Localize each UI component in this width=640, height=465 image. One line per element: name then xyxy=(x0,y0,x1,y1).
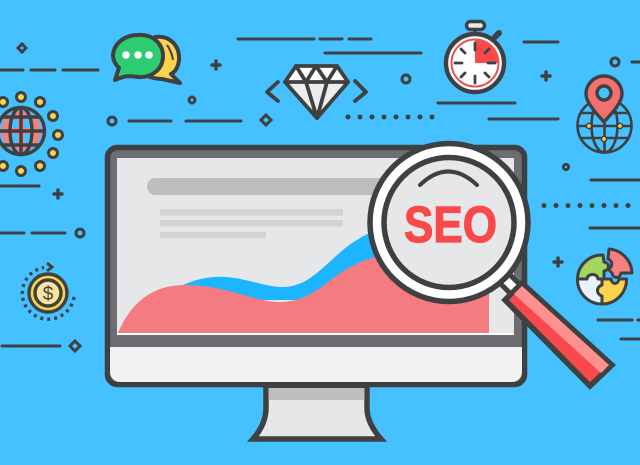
lens xyxy=(384,158,514,288)
glare arc xyxy=(420,172,477,185)
area chart: red series xyxy=(118,255,489,333)
small circle markers xyxy=(76,58,619,237)
handle xyxy=(505,283,612,386)
icon: dollar coin: $ xyxy=(43,284,54,305)
icon: chat bubbles xyxy=(113,35,180,83)
monitor xyxy=(108,148,524,384)
SEO label: SEO xyxy=(404,196,497,253)
screen xyxy=(117,158,514,335)
search bar xyxy=(147,178,407,195)
monitor stand xyxy=(253,387,381,439)
dotted lines xyxy=(346,114,630,208)
icon: globe with yellow dots xyxy=(0,92,62,176)
icon: gem diamond with chevrons xyxy=(267,66,366,118)
text placeholder lines xyxy=(160,209,343,238)
icon: location pin on globe xyxy=(578,76,632,153)
lens ring xyxy=(370,144,528,302)
diamond markers xyxy=(18,44,271,351)
icon: stopwatch xyxy=(446,22,504,92)
icon: puzzle xyxy=(577,249,632,304)
icon: dollar coin xyxy=(22,263,74,319)
plus markers xyxy=(54,61,562,266)
area chart: blue series xyxy=(183,215,420,300)
handle neck xyxy=(503,277,518,292)
magnifying glass xyxy=(370,144,612,386)
